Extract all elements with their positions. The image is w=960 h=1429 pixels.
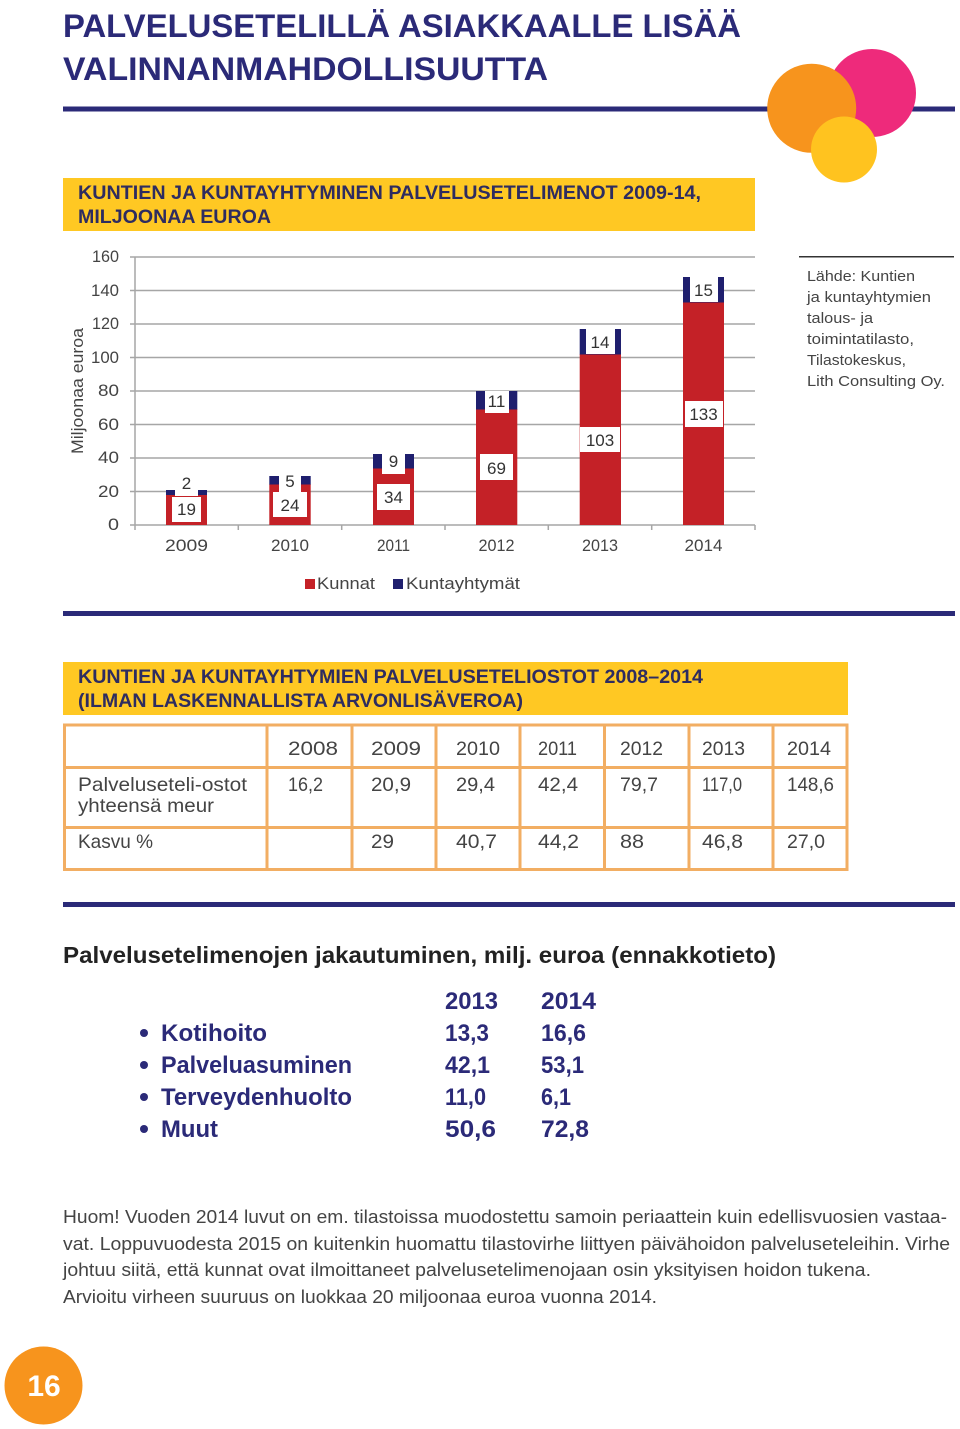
y axis labels: 100 <box>91 348 119 367</box>
table heading <box>63 662 848 715</box>
y axis title: Miljoonaa euroa <box>68 327 87 454</box>
row: Terveydenhuolto <box>140 1084 571 1111</box>
table row: growth <box>78 831 825 853</box>
table header row: 2008 <box>288 738 338 760</box>
table header row: 2012 <box>620 738 663 760</box>
row: Muut <box>140 1116 589 1143</box>
source note: Lähde: Kuntien <box>807 268 915 285</box>
bar 2014: 133 <box>689 405 718 424</box>
y axis labels: 40 <box>98 448 119 467</box>
table row: total purchases: 42,4 <box>538 774 578 796</box>
table row: total purchases: 20,9 <box>371 774 411 796</box>
row: Muut: Muut <box>161 1116 218 1143</box>
row: Kotihoito: Kotihoito <box>161 1020 267 1047</box>
y axis labels: 20 <box>98 482 119 501</box>
row: Palveluasuminen <box>140 1052 584 1079</box>
source note: toimintatilasto, <box>807 331 914 348</box>
bar 2009 <box>166 474 207 525</box>
chart legend: Kuntayhtymät <box>406 574 520 593</box>
row: Palveluasuminen: 42,1 <box>445 1052 490 1079</box>
note text: Huom! Vuoden 2014 luvut on em. tilastoissa muodostettu samoin periaattein kuin edellisvuosien vastaa- <box>63 1207 947 1227</box>
source note: Lith Consulting Oy. <box>807 373 945 390</box>
y axis labels: 120 <box>92 314 119 333</box>
list years: 2014 <box>541 988 597 1015</box>
table header row: 2013 <box>702 738 745 760</box>
bar 2011 <box>373 452 414 525</box>
table row: growth: 88 <box>620 831 644 853</box>
note text: Arvioitu virheen suuruus on luokkaa 20 miljoonaa euroa vuonna 2014. <box>63 1287 657 1307</box>
note text <box>62 1207 950 1307</box>
source note: talous- ja <box>807 310 874 327</box>
x axis labels: 2009 <box>165 536 208 555</box>
table header row: 2010 <box>456 738 500 760</box>
chart heading: MILJOONAA EUROA <box>78 207 271 228</box>
source note <box>799 256 954 390</box>
bar 2009: 2 <box>182 474 191 493</box>
y axis labels: 160 <box>92 247 119 266</box>
source note: Tilastokeskus, <box>807 352 906 369</box>
table row: growth: 46,8 <box>702 831 743 853</box>
row: Terveydenhuolto: Terveydenhuolto <box>161 1084 352 1111</box>
bar 2010: 24 <box>281 496 299 515</box>
bar 2013: 14 <box>591 333 609 352</box>
bar 2012: 69 <box>487 459 506 478</box>
bar 2012: 11 <box>488 392 505 411</box>
table header row: 2009 <box>371 738 421 760</box>
bar 2014: 15 <box>694 281 713 300</box>
table row: total purchases: 79,7 <box>620 774 658 796</box>
table row: growth: 29 <box>371 831 394 853</box>
source note: ja kuntayhtymien <box>806 289 931 306</box>
x axis labels: 2014 <box>684 536 722 555</box>
stacked bar chart <box>68 247 755 555</box>
note text: vat. Loppuvuodesta 2015 on kuitenkin huomattu tilastovirhe liittyen päivähoidon palveluseteleihin. Virhe <box>63 1234 950 1254</box>
table heading: KUNTIEN JA KUNTAYHTYMIEN PALVELUSETELIOSTOT 2008–2014 <box>78 667 703 688</box>
y axis labels <box>91 247 119 534</box>
section heading: Palvelusetelimenojen jakautuminen, milj. euroa (ennakkotieto) <box>63 942 776 968</box>
chart legend <box>305 574 520 593</box>
row: Terveydenhuolto: 11,0 <box>445 1084 486 1111</box>
x axis labels: 2012 <box>478 536 514 555</box>
page number badge: 16 <box>27 1370 61 1403</box>
table row: growth: 44,2 <box>538 831 579 853</box>
x axis labels: 2010 <box>271 536 309 555</box>
bar 2013: 103 <box>586 431 614 450</box>
table row: total purchases: Palveluseteli-ostot <box>78 774 248 796</box>
page number badge <box>4 1346 82 1424</box>
x axis labels: 2011 <box>377 536 410 555</box>
row: Kotihoito: 16,6 <box>541 1020 586 1047</box>
row: Palveluasuminen: 53,1 <box>541 1052 584 1079</box>
bar 2011: 9 <box>389 452 398 471</box>
title <box>63 8 741 87</box>
table row: total purchases: 148,6 <box>787 774 834 796</box>
table row: growth: 27,0 <box>787 831 825 853</box>
bar 2010: 5 <box>285 472 295 491</box>
bar 2012 <box>476 391 517 525</box>
table heading: (ILMAN LASKENNALLISTA ARVONLISÄVEROA) <box>78 691 523 712</box>
distribution list <box>140 988 597 1143</box>
row: Kotihoito: 13,3 <box>445 1020 489 1047</box>
table header row <box>288 738 831 760</box>
bar 2010 <box>269 472 311 525</box>
y axis labels: 80 <box>98 381 119 400</box>
table: voucher purchases <box>64 725 847 870</box>
header rule with decorative circles <box>63 49 955 182</box>
table row: total purchases: 16,2 <box>288 774 323 796</box>
bar 2011: 34 <box>384 488 403 507</box>
table row: total purchases <box>78 774 834 817</box>
row: Terveydenhuolto: 6,1 <box>541 1084 571 1111</box>
y axis labels: 0 <box>108 515 119 534</box>
bar 2014 <box>683 277 724 525</box>
table row: total purchases: yhteensä meur <box>78 795 215 817</box>
note text: johtuu siitä, että kunnat ovat ilmoittaneet palvelusetelimenojaan osin yksityisen hoidon tukena. <box>62 1260 871 1280</box>
table row: total purchases: 29,4 <box>456 774 495 796</box>
chart legend: Kunnat <box>317 574 375 593</box>
table row: growth: Kasvu % <box>78 831 153 853</box>
bar 2013 <box>580 329 621 525</box>
row: Kotihoito <box>140 1020 586 1047</box>
x axis labels <box>165 536 722 555</box>
x axis labels: 2013 <box>582 536 618 555</box>
y axis labels: 140 <box>91 281 119 300</box>
row: Muut: 50,6 <box>445 1116 496 1143</box>
y axis labels: 60 <box>98 415 119 434</box>
chart heading <box>63 178 755 231</box>
table header row: 2011 <box>538 738 577 760</box>
list years <box>445 988 597 1015</box>
table header row: 2014 <box>787 738 831 760</box>
row: Palveluasuminen: Palveluasuminen <box>161 1052 352 1079</box>
row: Muut: 72,8 <box>541 1116 589 1143</box>
title: PALVELUSETELILLÄ ASIAKKAALLE LISÄÄ <box>63 8 741 44</box>
list years: 2013 <box>445 988 498 1015</box>
table row: growth: 40,7 <box>456 831 497 853</box>
bar 2009: 19 <box>177 500 196 519</box>
chart heading: KUNTIEN JA KUNTAYHTYMINEN PALVELUSETELIMENOT 2009-14, <box>78 183 701 204</box>
title: VALINNANMAHDOLLISUUTTA <box>63 51 548 87</box>
table row: total purchases: 117,0 <box>702 774 742 796</box>
